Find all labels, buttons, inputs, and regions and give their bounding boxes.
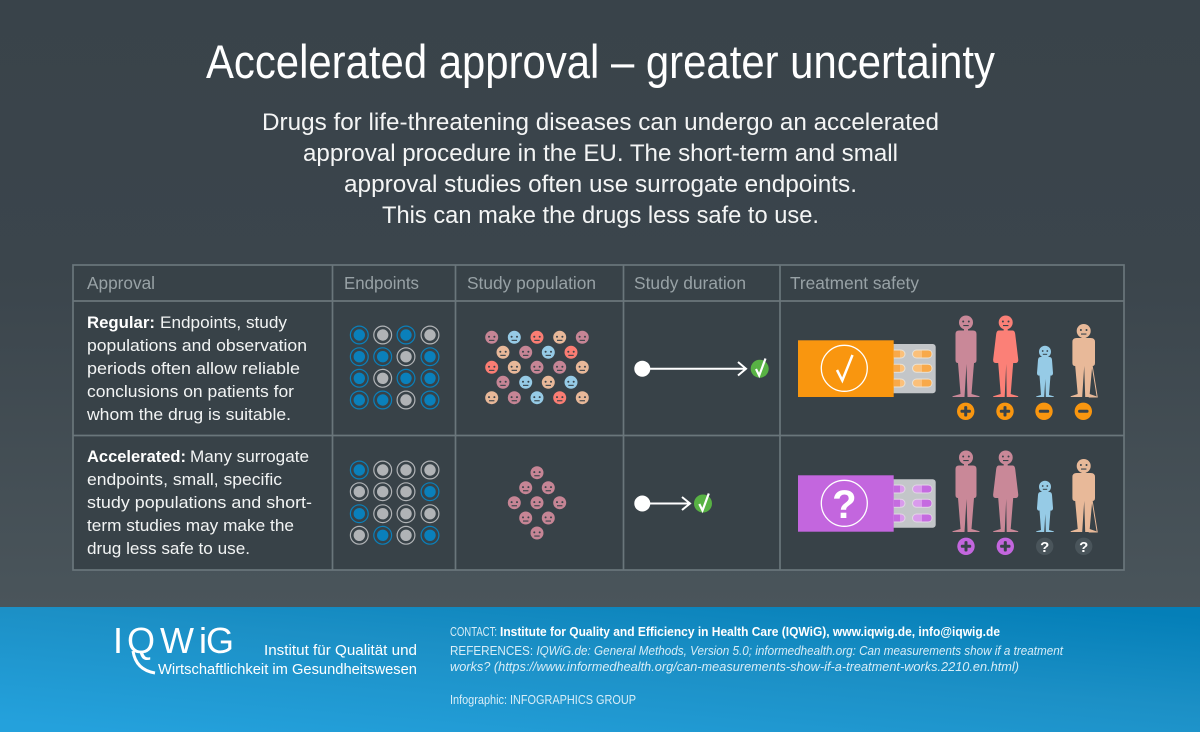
regular approval description: conclusions on patients for: [87, 383, 295, 401]
study population: regular, large and mixed: [485, 331, 589, 404]
IQWiG logo: [113, 620, 417, 678]
accelerated approval description: Accelerated:: [87, 448, 186, 466]
table header row: Treatment safety: [790, 273, 919, 293]
references: REFERENCES: IQWiG.de: General Methods, Version 5.0; informedhealth.org: Can measurements show if a treatment: [450, 644, 1063, 658]
study population: accelerated, small and uniform: [508, 466, 566, 540]
IQWiG logo: IQWiG: [113, 620, 234, 661]
references: works? (https://www.informedhealth.org/can-measurements-show-if-a-treatment-works.2210.en.html): [450, 660, 1019, 674]
accelerated approval description: study populations and short-: [87, 494, 312, 512]
accelerated approval description: Many surrogate: [190, 448, 309, 466]
comparison table: [73, 265, 1124, 570]
intro text: approval studies often use surrogate endpoints.: [344, 171, 857, 198]
patient figures: accelerated approval: [952, 450, 1097, 532]
regular approval description: populations and observation: [87, 337, 307, 355]
accelerated approval description: endpoints, small, specific: [87, 471, 282, 489]
table header row: Approval: [87, 273, 155, 293]
contact line: CONTACT:: [450, 625, 497, 639]
table header row: Study population: [467, 273, 596, 293]
endpoints grid: accelerated: [350, 461, 439, 544]
benefit and unknown badges: accelerated approval: ?: [1079, 539, 1088, 556]
endpoints grid: regular: [350, 326, 439, 409]
footer band: [0, 607, 1200, 732]
regular approval description: Regular:: [87, 314, 155, 332]
patient figures: regular approval: [952, 316, 1097, 397]
regular approval description: whom the drug is suitable.: [86, 406, 291, 424]
arrow: regular study duration: [634, 358, 769, 378]
icon: accelerated drug pack with question mark: ?: [832, 483, 857, 527]
IQWiG logo: Wirtschaftlichkeit im Gesundheitswesen: [158, 662, 417, 678]
intro text: [262, 109, 939, 229]
arrow: accelerated study duration: [634, 494, 712, 512]
accelerated approval description: [87, 448, 312, 558]
IQWiG logo: Institut für Qualität und: [264, 643, 417, 659]
infographic credit: Infographic: INFOGRAPHICS GROUP: [450, 693, 636, 707]
benefit and harm badges: regular approval: [957, 403, 1092, 420]
regular approval description: Endpoints, study: [160, 314, 288, 332]
contact line: Institute for Quality and Efficiency in Health Care (IQWiG), www.iqwig.de, info@iqwig.de: [500, 625, 1000, 639]
table header row: [87, 273, 919, 293]
references: [450, 644, 1063, 674]
intro text: This can make the drugs less safe to use.: [382, 202, 819, 229]
accelerated approval description: drug less safe to use.: [87, 540, 250, 558]
icon: regular drug pack with check mark: [798, 340, 936, 397]
accelerated approval description: term studies may make the: [87, 517, 294, 535]
regular approval description: periods often allow reliable: [87, 360, 300, 378]
title: Accelerated approval – greater uncertainty: [206, 35, 995, 88]
icon: accelerated drug pack with question mark: [798, 475, 936, 532]
benefit and unknown badges: accelerated approval: ?: [1040, 539, 1049, 556]
table header row: Endpoints: [344, 273, 419, 293]
intro text: approval procedure in the EU. The short-term and small: [303, 140, 898, 167]
benefit and unknown badges: accelerated approval: [957, 538, 1092, 556]
intro text: Drugs for life-threatening diseases can undergo an accelerated: [262, 109, 939, 136]
table header row: Study duration: [634, 273, 746, 293]
regular approval description: [86, 314, 307, 424]
